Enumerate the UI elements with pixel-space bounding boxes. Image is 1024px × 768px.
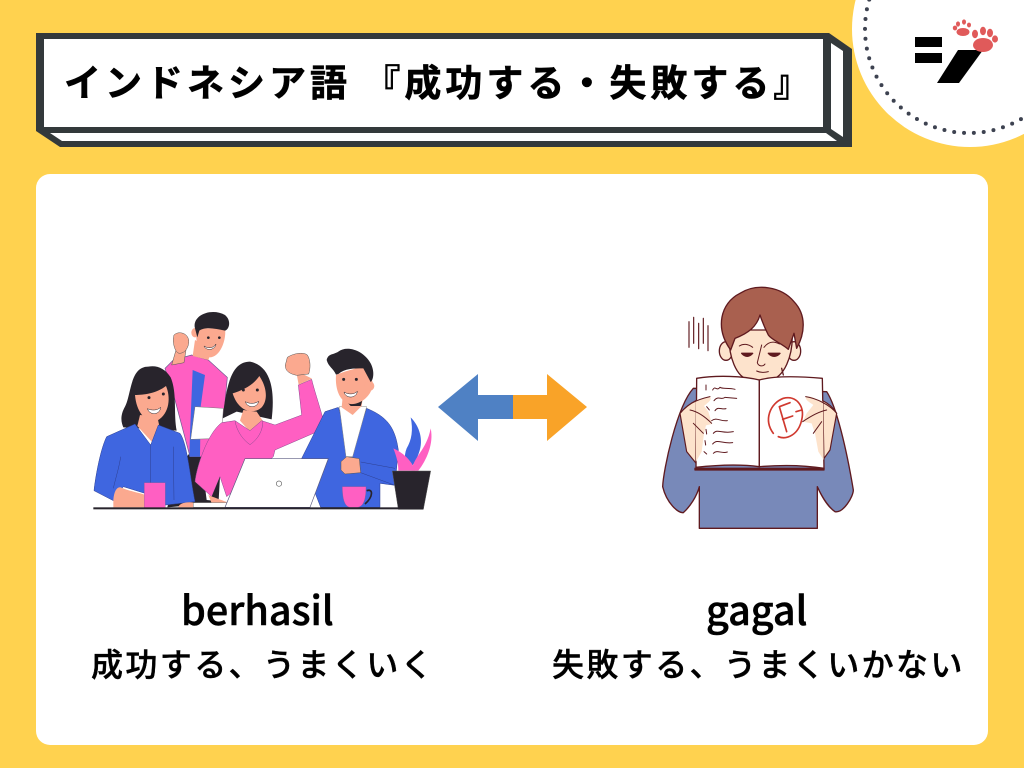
label: gagal: gagal bbox=[706, 580, 807, 637]
middle woman bbox=[195, 353, 325, 507]
potted plant bbox=[392, 417, 431, 509]
red F grade bbox=[769, 398, 802, 438]
sweater bbox=[663, 388, 853, 528]
label: gagal meaning: 失敗する、うまくいかない bbox=[552, 640, 965, 686]
label: berhasil meaning: 成功する、うまくいく bbox=[91, 640, 435, 686]
left woman bbox=[94, 366, 195, 508]
main white panel bbox=[36, 174, 988, 745]
coffee mug bbox=[342, 487, 371, 507]
title text: インドネシア語 『成功する・失敗する』 bbox=[64, 53, 814, 107]
label: berhasil: berhasil bbox=[181, 580, 334, 637]
right man bbox=[302, 349, 398, 507]
title box bbox=[36, 33, 852, 147]
table line bbox=[93, 507, 423, 509]
open book bbox=[695, 376, 824, 470]
head bbox=[719, 287, 803, 380]
worry lines bbox=[689, 317, 708, 351]
laptop bbox=[193, 459, 328, 507]
hands bbox=[680, 396, 837, 464]
hand fingers over book bbox=[680, 396, 837, 462]
list scribbles bbox=[704, 385, 737, 454]
back man bbox=[165, 312, 229, 507]
